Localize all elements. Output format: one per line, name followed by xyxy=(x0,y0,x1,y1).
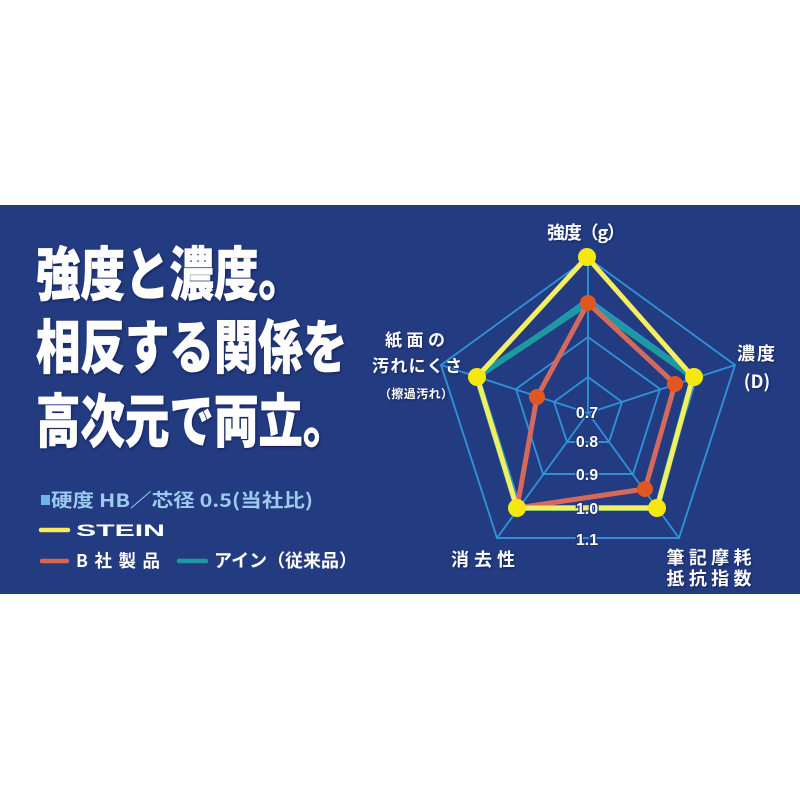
chart grid: pentagon rings and spokes xyxy=(441,258,735,538)
axis label: density: (D) xyxy=(744,368,770,394)
axis label: density: 濃度 xyxy=(737,340,775,366)
series: STEIN xyxy=(468,248,703,517)
scale labels: 1.1 xyxy=(576,532,598,549)
axis label: strength: 強度（g） xyxy=(547,219,625,245)
axis label: erasability: 消去性 xyxy=(451,546,515,572)
legend note: hardness and lead size: 硬度 HB／芯径 0.5(当社比) xyxy=(51,487,313,513)
axis label: density xyxy=(737,340,775,394)
title: three line heading: 高次元で両立。 xyxy=(36,375,347,459)
title: three line heading: 相反する関係を xyxy=(36,301,347,385)
series: Ain conventional product xyxy=(477,303,693,508)
scale labels: 1.0 xyxy=(576,501,598,518)
axis label: paper surface stain resistance xyxy=(372,326,462,402)
title: three line heading xyxy=(36,228,347,459)
scale labels xyxy=(576,405,598,549)
legend item: STEIN xyxy=(41,521,165,540)
series: B company product xyxy=(517,295,683,508)
scale labels: 0.9 xyxy=(576,467,598,484)
title: three line heading: 強度と濃度。 xyxy=(36,228,303,312)
axis label: paper surface stain resistance: 汚れにくさ xyxy=(372,352,462,377)
legend item: B company product: B 社 製 品 xyxy=(76,548,160,573)
axis label: writing abrasion resistance index: 筆記摩耗 xyxy=(666,544,752,570)
legend item: Ain conventional product: アイン（従来品） xyxy=(214,547,357,573)
radar chart xyxy=(372,219,775,591)
legend item: STEIN: STEIN xyxy=(76,521,165,540)
panel: navy background band xyxy=(0,205,800,594)
axis label: paper surface stain resistance: 紙面の xyxy=(385,326,445,351)
axis label: paper surface stain resistance: （擦過汚れ） xyxy=(379,385,453,402)
axis label: writing abrasion resistance index: 抵抗指数 xyxy=(666,565,752,591)
scale labels: 0.8 xyxy=(576,434,598,451)
axis label: writing abrasion resistance index xyxy=(666,544,752,591)
legend xyxy=(41,487,357,573)
scale labels: 0.7 xyxy=(576,405,598,422)
